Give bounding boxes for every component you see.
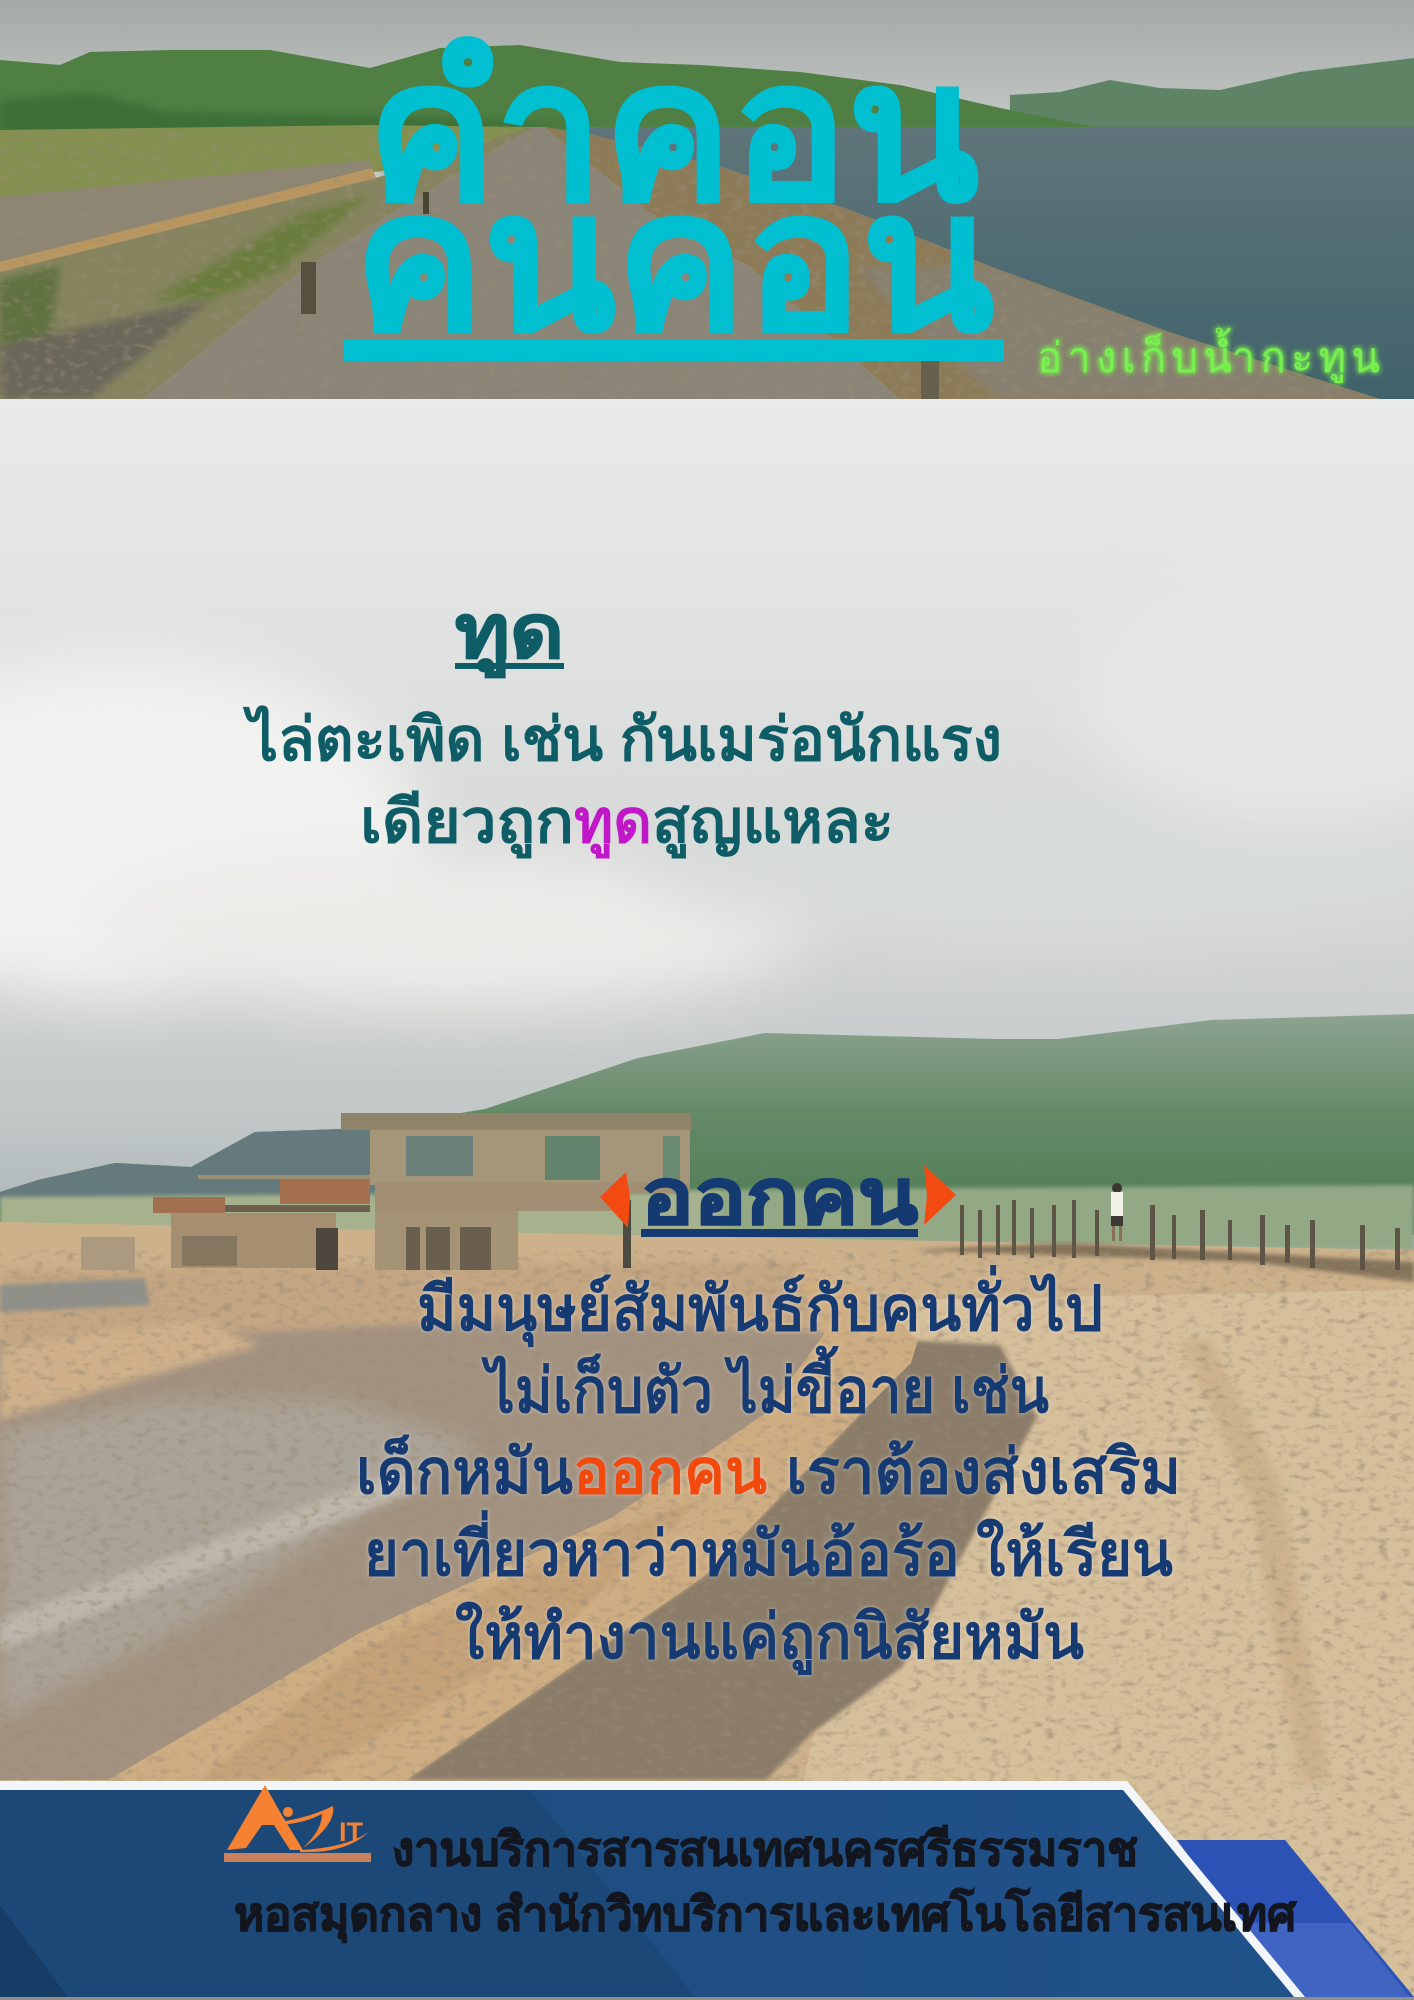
body line 3: เราต้องส่งเสริม [786, 1438, 1181, 1507]
main title [354, 23, 994, 371]
left field [0, 125, 532, 200]
body line 5: ให้ทำงานแค่ถูกนิสัยหมัน [455, 1601, 1084, 1675]
bottom image strip [0, 1997, 1414, 2000]
road edge shadow [910, 1243, 1414, 1282]
definition line 2: สูญแหละ [652, 788, 894, 859]
ruined building [81, 1113, 691, 1270]
panel: header reservoir photo [0, 0, 1414, 399]
road [144, 127, 900, 399]
body line 1: มีมนุษย์สัมพันธ์กับคนทั่วไป [417, 1265, 1103, 1347]
definition: ออกคน [356, 1265, 1181, 1675]
right embankment [545, 127, 1380, 399]
blue accent shape [1177, 1840, 1414, 1997]
left gravel flat [0, 1300, 825, 1780]
water patch [0, 1278, 150, 1312]
blue panel [0, 1790, 1294, 1997]
far hills right [1010, 58, 1414, 130]
body line 4: ยาเที่ยวหาว่าหมันอ้อร้อ ให้เรียน [364, 1510, 1173, 1589]
dark gravel band [406, 1340, 1037, 1780]
word heading: ทูด: ทูด [455, 590, 564, 678]
fence posts [301, 262, 316, 314]
body line 3: ออกคน [573, 1438, 767, 1507]
ground texture [0, 1250, 1414, 2000]
definition line 2: ทูด [574, 788, 652, 859]
white border [0, 1781, 1305, 1997]
person [1111, 1183, 1123, 1241]
definition line 2 [360, 788, 894, 859]
tyre tracks [1180, 1340, 1330, 1781]
word heading: ออกคน [600, 1155, 956, 1240]
location caption: อ่างเก็บน้ำกะทูน [1037, 327, 1380, 383]
left orange marker [600, 1172, 630, 1228]
footer banner [0, 1781, 1414, 2000]
fence posts [960, 1200, 1400, 1270]
logo: A2IT [224, 1785, 371, 1862]
definition line 1: ไล่ตะเพิด เช่น กันเมร่อนักแรง [242, 704, 1002, 773]
body line 2: ไม่เก็บตัว ไม่ขี้อาย เช่น [480, 1345, 1049, 1426]
distant hills [0, 1014, 1414, 1235]
header texture [0, 130, 1414, 399]
body line 3: เด็กหมัน [356, 1434, 573, 1507]
footer line 2: หอสมุดกลาง สำนักวิทบริการและเทศโนโลยีสารสนเทศ [234, 1887, 1297, 1943]
title line 2: คนคอน [354, 153, 994, 371]
pale sand strip [108, 1265, 918, 1780]
right orange marker [924, 1165, 956, 1225]
title underline [343, 339, 1004, 361]
hills left [0, 45, 1095, 140]
ground base [0, 1222, 1414, 1781]
wet mud [0, 1400, 480, 1720]
definition: ทูด [242, 704, 1002, 859]
water [586, 127, 1414, 399]
word heading: ออกคน: ออกคน [641, 1155, 918, 1240]
reed field [680, 1185, 1414, 1250]
rocky planted slope [0, 127, 532, 399]
definition line 2: เดียวถูก [360, 788, 574, 859]
footer line 1: งานบริการสารสนเทศนครศรีธรรมราช [392, 1823, 1138, 1875]
logo: A2IT: IT [339, 1817, 364, 1847]
title line 1: คำคอน [367, 23, 979, 241]
clouds [0, 656, 1414, 1031]
body line 3 [356, 1434, 1181, 1507]
